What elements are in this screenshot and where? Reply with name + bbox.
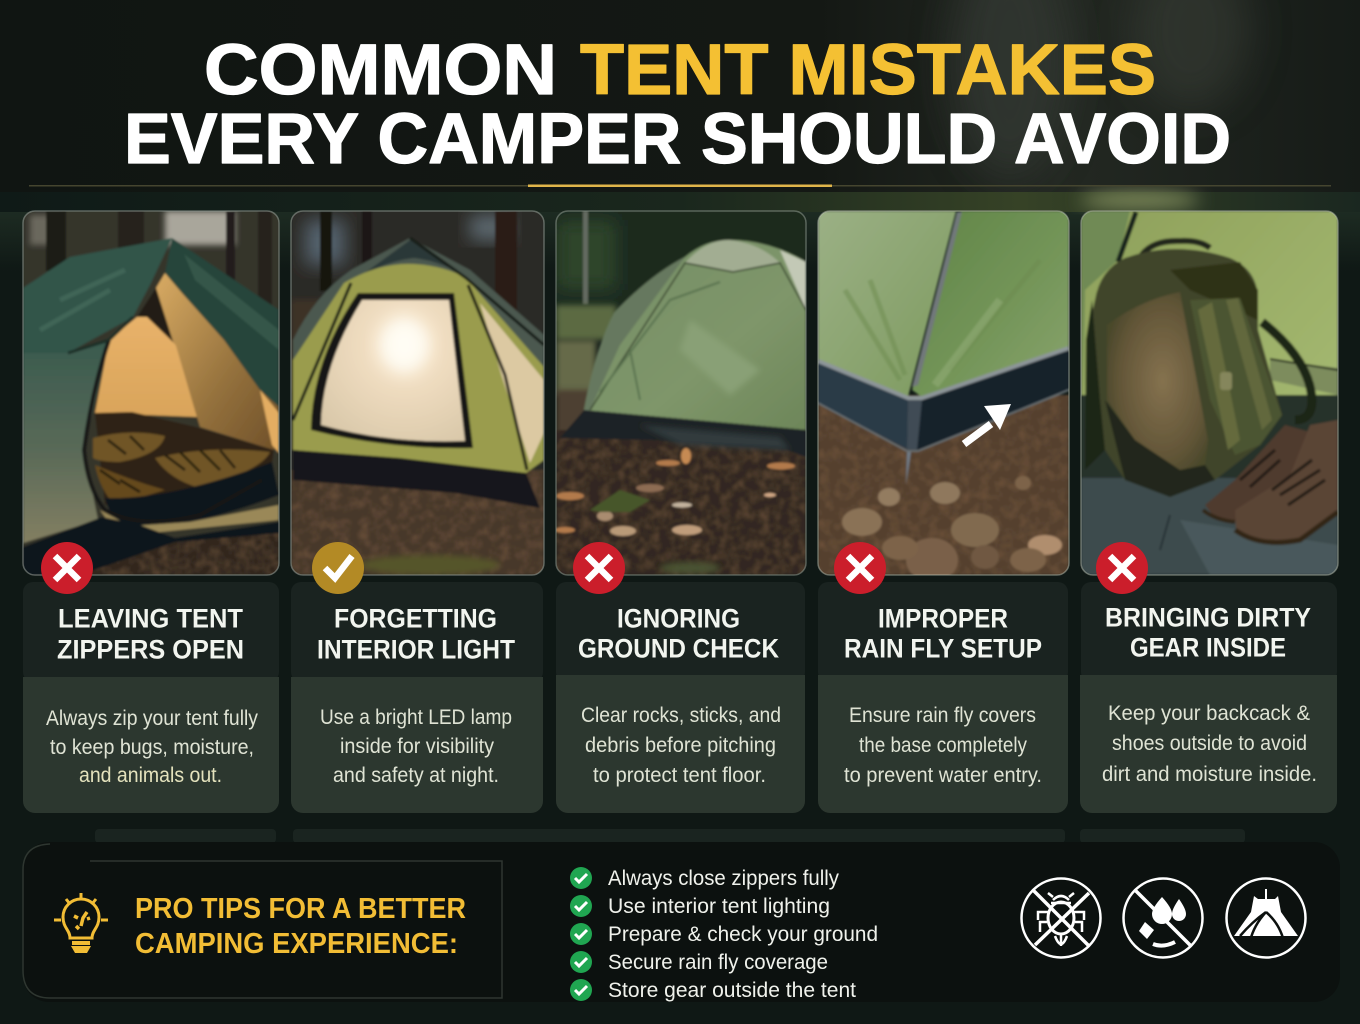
- photo: muddy backpack and boots: [1081, 211, 1338, 575]
- icon: tent: [1226, 878, 1306, 958]
- card 1 heading panel: [23, 582, 279, 682]
- panel: pro tips bar: [23, 842, 1340, 1002]
- card 5 photo border: [1081, 211, 1338, 575]
- title divider: [29, 184, 1331, 187]
- panel: card 4 improper rain fly setup: [818, 211, 1069, 813]
- card 5 heading panel: GEAR INSIDE: [1130, 632, 1286, 662]
- card 3 heading panel: [556, 582, 805, 682]
- title: EVERY CAMPER SHOULD AVOID: [124, 100, 1231, 179]
- icon: white arrow: [964, 404, 1011, 444]
- card 2 description: inside for visibility: [340, 735, 494, 758]
- panel: card 1 leaving tent zippers open: [23, 211, 279, 813]
- card 5 heading panel: BRINGING DIRTY: [1105, 602, 1311, 632]
- card 1 description: and animals out.: [79, 764, 222, 787]
- card 2 description: Use a bright LED lamp: [320, 706, 512, 729]
- card 1 heading panel: ZIPPERS OPEN: [57, 634, 244, 664]
- photo: tent on debris: [555, 211, 806, 575]
- pro tips heading: [135, 893, 466, 960]
- card 2 photo border: [291, 211, 544, 575]
- panel: card 5 bringing dirty gear inside: [1080, 211, 1338, 813]
- card 4 description: to prevent water entry.: [844, 764, 1042, 787]
- panel: card 3 ignoring ground check: [555, 211, 806, 813]
- card 2 description: [291, 677, 543, 813]
- card 5 heading panel: [1081, 582, 1337, 682]
- card 3 heading panel: IGNORING: [617, 603, 740, 633]
- card 4 description: [818, 675, 1068, 813]
- pro tips frame: [23, 844, 502, 998]
- checklist of tips: Use interior tent lighting: [608, 895, 830, 918]
- checklist of tips: [570, 867, 878, 1002]
- card 5 description: dirt and moisture inside.: [1102, 763, 1317, 786]
- card 4 photo border: [818, 211, 1069, 575]
- header forest backdrop: [0, 0, 1360, 272]
- pro tips heading: CAMPING EXPERIENCE:: [135, 928, 458, 960]
- title: [124, 31, 1231, 179]
- card 3 description: Clear rocks, sticks, and: [581, 704, 781, 727]
- card 5 description: [1080, 675, 1337, 813]
- icon: gold check badge: [312, 542, 364, 594]
- card 4 description: Ensure rain fly covers: [849, 704, 1036, 727]
- checklist of tips: Store gear outside the tent: [608, 979, 856, 1002]
- card 2 description: and safety at night.: [333, 764, 499, 787]
- photo: rain fly corner: [818, 211, 1069, 582]
- card 3 description: to protect tent floor.: [593, 764, 766, 787]
- card 2 heading panel: [291, 582, 543, 682]
- icon: red cross badge: [573, 542, 625, 594]
- icon: no moisture: [1124, 878, 1202, 958]
- card 2 heading panel: INTERIOR LIGHT: [317, 634, 515, 664]
- card 3 heading panel: GROUND CHECK: [578, 633, 779, 663]
- title: COMMON: [204, 31, 557, 110]
- card 4 description: the base completely: [859, 734, 1027, 757]
- card 1 photo border: [23, 211, 279, 575]
- card 1 description: [23, 677, 279, 813]
- title: TENT MISTAKES: [580, 31, 1156, 110]
- card 2 heading panel: FORGETTING: [334, 603, 497, 633]
- icon: light bulb: [54, 893, 108, 953]
- checklist of tips: Secure rain fly coverage: [608, 951, 828, 974]
- card 3 description: [556, 675, 805, 813]
- icon: red cross badge: [41, 542, 93, 594]
- card 4 heading panel: [818, 582, 1068, 682]
- strips below cards: [95, 829, 1245, 843]
- icon: red cross badge: [834, 542, 886, 594]
- icon: red cross badge: [1096, 542, 1148, 594]
- checklist of tips: Prepare & check your ground: [608, 923, 878, 946]
- checklist of tips: Always close zippers fully: [608, 867, 839, 890]
- card 1 description: Always zip your tent fully: [46, 707, 258, 730]
- card 1 description: to keep bugs, moisture,: [50, 736, 254, 759]
- photo: tent lit from inside: [291, 211, 544, 575]
- card 5 description: shoes outside to avoid: [1112, 732, 1307, 755]
- pro tips heading: PRO TIPS FOR A BETTER: [135, 893, 466, 925]
- card 5 description: Keep your backcack &: [1108, 702, 1310, 725]
- card 3 photo border: [556, 211, 806, 575]
- card 3 description: debris before pitching: [585, 734, 776, 757]
- panel: card 2 forgetting interior light: [291, 211, 544, 813]
- card 4 heading panel: IMPROPER: [878, 603, 1008, 633]
- card 4 heading panel: RAIN FLY SETUP: [844, 633, 1042, 663]
- icon: no bugs: [1022, 878, 1100, 958]
- card 1 heading panel: LEAVING TENT: [58, 603, 243, 633]
- photo: open tent door: [23, 211, 279, 575]
